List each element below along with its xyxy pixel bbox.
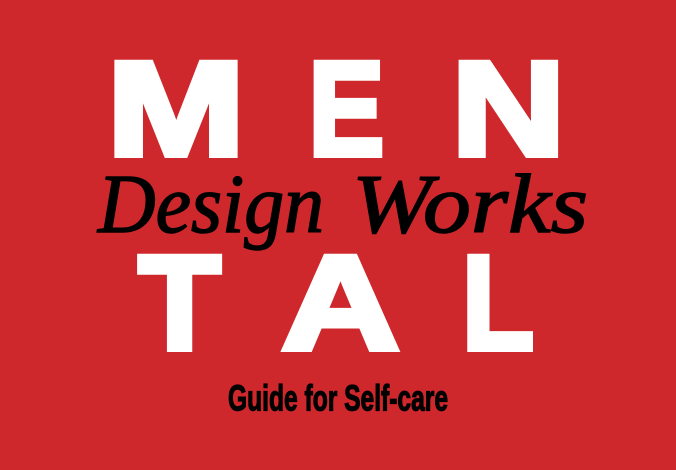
script overlay: Design Works <box>97 158 588 251</box>
title: MEN: N <box>452 35 565 184</box>
title: TAL <box>139 229 534 378</box>
script overlay: Design Works: Design <box>97 158 324 251</box>
title: MEN: E <box>309 35 384 184</box>
title: TAL: A <box>282 229 400 378</box>
title: MEN <box>107 35 565 184</box>
title: TAL: L <box>462 229 534 378</box>
title: TAL: T <box>139 229 221 378</box>
script overlay: Design Works: Works <box>352 158 588 251</box>
title: MEN: M <box>107 35 245 184</box>
subtitle: Guide for Self-care <box>228 378 448 418</box>
